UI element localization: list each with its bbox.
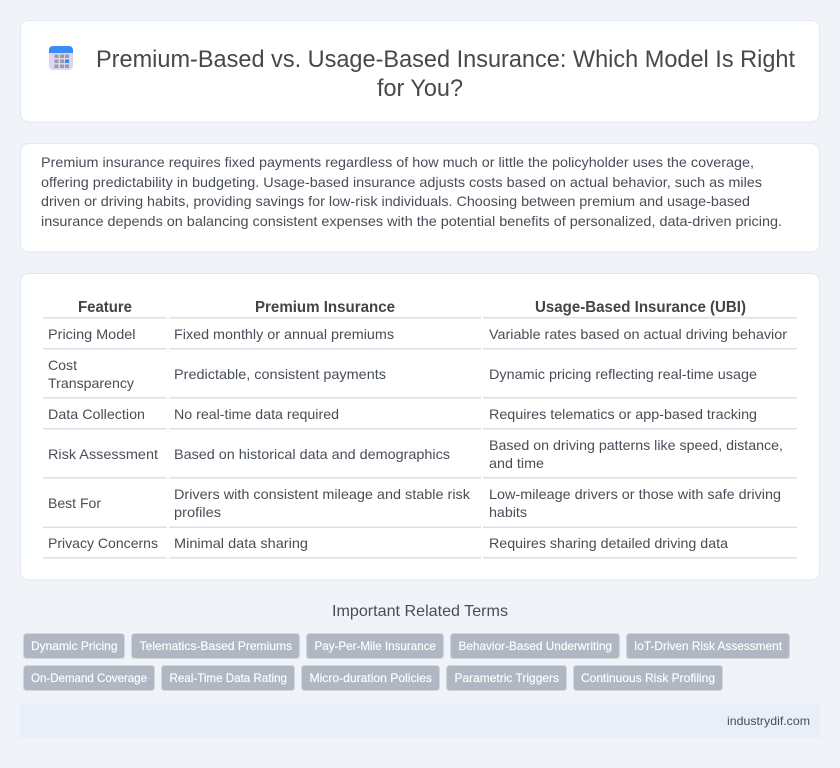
row: data collection: Data Collection (48, 406, 145, 422)
row: privacy concerns: Privacy Concerns (48, 535, 158, 551)
row: risk assessment: Based on driving patterns like speed, distance, (489, 437, 783, 453)
tag: dynamic pricing (24, 634, 124, 658)
tag: on-demand coverage: On-Demand Coverage (31, 671, 147, 685)
row: data collection: No real-time data required (174, 406, 339, 422)
icon: calendar (49, 46, 73, 70)
row: data collection: Requires telematics or app-based tracking (489, 406, 757, 422)
tag: pay-per-mile insurance (306, 634, 444, 658)
tag: telematics-based premiums: Telematics-Based Premiums (140, 639, 292, 653)
tags row 2 (24, 666, 722, 690)
tag: on-demand coverage (24, 666, 154, 690)
tags row 1 (24, 634, 790, 658)
heading: important related terms: Important Related Terms (332, 603, 508, 620)
row: data collection (48, 406, 757, 422)
text block: intro paragraph (41, 154, 782, 229)
tag: continuous risk profiling: Continuous Risk Profiling (581, 671, 715, 685)
tag: parametric triggers: Parametric Triggers (454, 671, 559, 685)
row: best for: Low-mileage drivers or those with safe driving (489, 486, 781, 502)
tag: continuous risk profiling (574, 666, 722, 690)
table header row: Feature (78, 299, 132, 316)
row: cost transparency: Transparency (48, 375, 134, 391)
row: risk assessment: Risk Assessment (48, 446, 158, 462)
tag: real-time data rating (162, 666, 294, 690)
tag: real-time data rating: Real-Time Data Rating (170, 671, 287, 685)
row: privacy concerns (48, 535, 728, 551)
row: best for: Best For (48, 495, 101, 511)
row: cost transparency: Cost (48, 357, 77, 373)
tag: micro-duration policies (302, 666, 440, 690)
tag: telematics-based premiums (132, 634, 300, 658)
row: best for: profiles (174, 504, 221, 520)
row: cost transparency: Predictable, consistent payments (174, 366, 386, 382)
row: pricing model: Variable rates based on actual driving behavior (489, 326, 787, 342)
panel: intro text (20, 144, 820, 252)
table header row: Usage-Based Insurance (UBI) (535, 299, 746, 316)
panel: comparison table (20, 274, 820, 580)
row: best for: habits (489, 504, 527, 520)
table header row: Premium Insurance (255, 299, 395, 316)
row: cost transparency: Dynamic pricing reflecting real-time usage (489, 366, 757, 382)
row: cost transparency (48, 357, 757, 391)
tag: parametric triggers (446, 666, 566, 690)
footer bar (20, 704, 820, 738)
title: for You? (377, 75, 463, 102)
row: privacy concerns: Minimal data sharing (174, 535, 308, 551)
tag: behavior-based underwriting (450, 634, 620, 658)
row: pricing model: Pricing Model (48, 326, 136, 342)
row: risk assessment: and time (489, 455, 544, 471)
title (96, 46, 795, 102)
row: best for (48, 486, 781, 520)
tag: pay-per-mile insurance: Pay-Per-Mile Insurance (314, 639, 436, 653)
row: privacy concerns: Requires sharing detailed driving data (489, 535, 728, 551)
row: best for: Drivers with consistent mileage and stable risk (174, 486, 471, 502)
title: Premium-Based vs. Usage-Based Insurance: Which Model Is Right (96, 46, 795, 73)
tag: iot-driven risk assessment (626, 634, 790, 658)
tag: iot-driven risk assessment: IoT-Driven Risk Assessment (634, 639, 783, 653)
tag: behavior-based underwriting: Behavior-Based Underwriting (458, 639, 612, 653)
text block: intro paragraph: insurance depends on balancing consistent expenses with the potential benefits of personalized, data-driven pricing. (41, 213, 782, 229)
row: risk assessment (48, 437, 783, 471)
text block: intro paragraph: Premium insurance requires fixed payments regardless of how much or little the policyholder uses the coverage, (41, 154, 754, 170)
tag: micro-duration policies: Micro-duration Policies (310, 671, 432, 685)
tag: dynamic pricing: Dynamic Pricing (31, 639, 118, 653)
text block: intro paragraph: offering predictability in budgeting. Usage-based insurance adjusts costs based on actual behavior, such as miles (41, 174, 762, 190)
row: risk assessment: Based on historical data and demographics (174, 446, 450, 462)
row: pricing model (48, 326, 787, 342)
footer source: industrydif.com (727, 714, 810, 728)
table header row (78, 299, 746, 316)
row: pricing model: Fixed monthly or annual premiums (174, 326, 394, 342)
text block: intro paragraph: driven or driving habits, providing savings for low-risk individuals. Choosing between premium and usage-based (41, 193, 750, 209)
panel: header (20, 20, 820, 122)
